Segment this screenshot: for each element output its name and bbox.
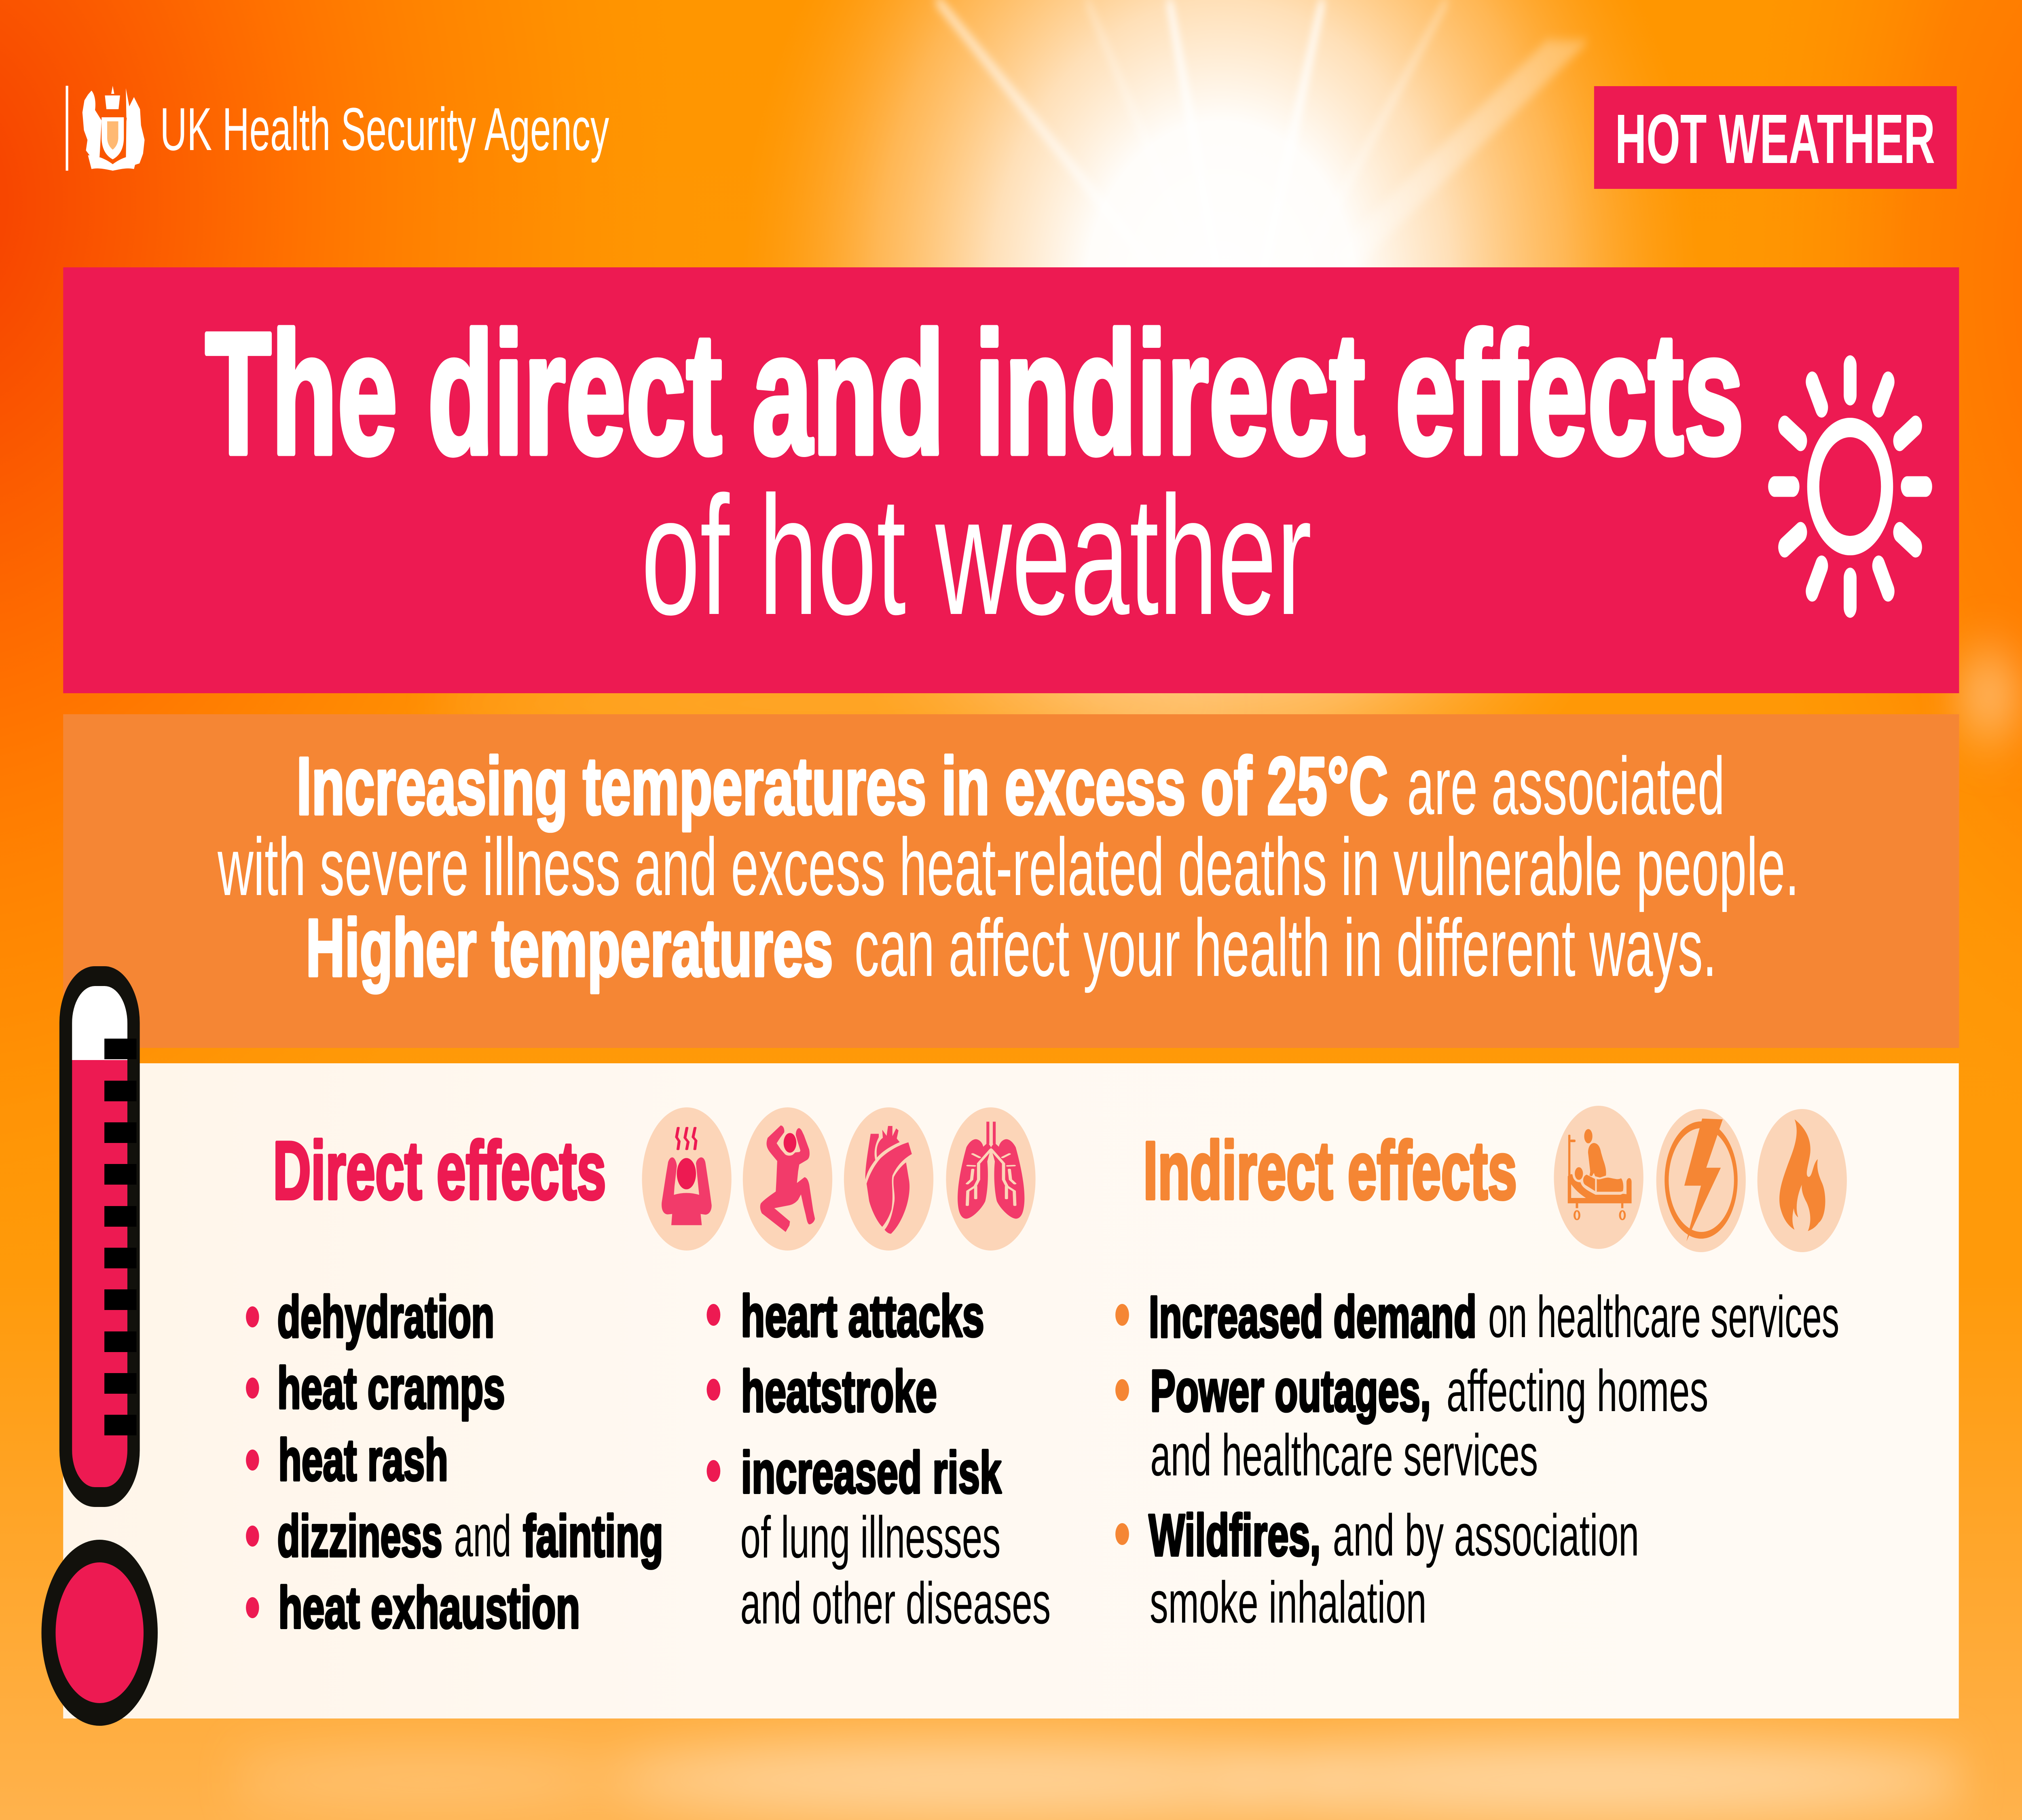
list: direct effects column one: dizziness [277, 1503, 442, 1569]
icon: lungs [946, 1107, 1036, 1251]
list: direct effects column one [246, 1284, 663, 1640]
list: indirect effects [1115, 1284, 1839, 1635]
icon: overheated person [642, 1107, 732, 1251]
list: direct effects column two: heatstroke [741, 1358, 937, 1424]
list: indirect effects: affecting homes [1447, 1358, 1708, 1424]
icon: sun [1775, 366, 1926, 607]
intro line 3 [306, 902, 1717, 993]
title panel [63, 267, 1959, 693]
panel: effects [63, 1063, 1959, 1718]
icon: cramping figure [743, 1107, 832, 1251]
list: direct effects column one: dehydration [277, 1284, 494, 1350]
list: indirect effects: and by association [1333, 1502, 1639, 1568]
heading: direct effects: Direct effects [273, 1125, 606, 1216]
intro line 1: are associated [1407, 741, 1725, 832]
logo: UK Health Security Agency [66, 86, 609, 171]
list: indirect effects: on healthcare services [1488, 1284, 1839, 1350]
title [205, 296, 1744, 650]
list: direct effects column one: heat rash [278, 1427, 448, 1493]
icon: patient in hospital bed [1554, 1106, 1643, 1249]
icon: royal coat of arms [82, 86, 145, 171]
list: direct effects column two [707, 1283, 1051, 1636]
list: direct effects column two: of lung illnesses [740, 1504, 1000, 1570]
list: direct effects column one: heat exhaustion [278, 1575, 580, 1640]
icon: heart [844, 1107, 933, 1251]
list: direct effects column two: increased risk [741, 1439, 1001, 1505]
list: indirect effects: Wildfires, [1149, 1502, 1321, 1568]
icon: power outage lightning bolt [1656, 1109, 1746, 1252]
intro line 3: can affect your health in different ways. [854, 902, 1717, 993]
icon: thermometer [41, 966, 158, 1726]
badge: hot weather [1594, 86, 1957, 189]
list: direct effects column one: heat cramps [277, 1355, 505, 1421]
intro line 2: with severe illness and excess heat-related deaths in vulnerable people. [217, 821, 1799, 912]
list: indirect effects: smoke inhalation [1150, 1569, 1426, 1635]
title: The direct and indirect effects [205, 296, 1744, 490]
list: direct effects column two: and other diseases [740, 1570, 1051, 1636]
heading: indirect effects: Indirect effects [1143, 1125, 1517, 1216]
list: direct effects column one: fainting [523, 1503, 663, 1569]
list: direct effects column two: heart attacks [741, 1283, 984, 1349]
agency name: UK Health Security Agency [160, 95, 609, 163]
list: indirect effects: and healthcare services [1150, 1422, 1538, 1488]
panel: intro statement [63, 714, 1959, 1048]
icon: wildfire flame [1758, 1109, 1847, 1252]
badge: hot weather: HOT WEATHER [1615, 99, 1935, 178]
title: of hot weather [641, 461, 1312, 650]
list: direct effects column one: and [454, 1503, 511, 1569]
list: indirect effects: Power outages, [1150, 1358, 1431, 1424]
intro line 1: Increasing temperatures in excess of 25°C [296, 741, 1388, 832]
intro line 3: Higher temperatures [306, 902, 833, 993]
list: indirect effects: Increased demand [1149, 1284, 1476, 1350]
